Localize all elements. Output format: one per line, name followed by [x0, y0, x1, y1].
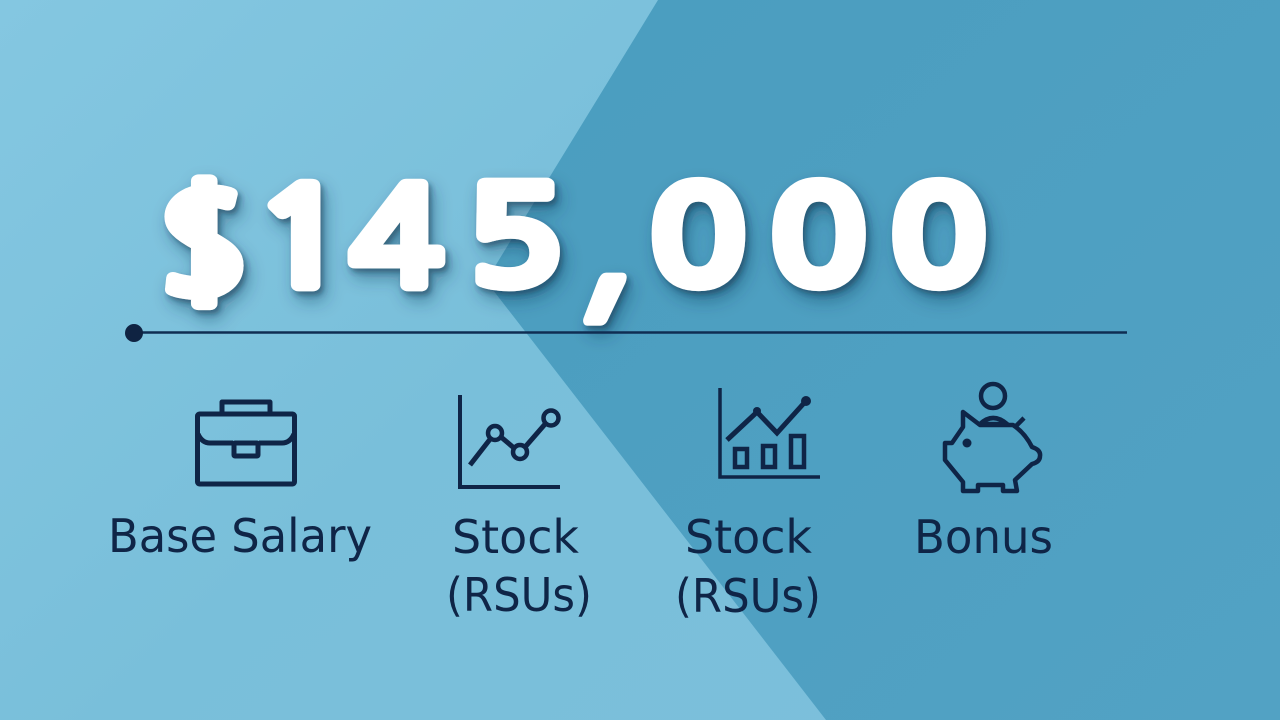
headline amount: 0 — [769, 172, 868, 306]
icon: line chart — [460, 395, 560, 487]
label: stock RSUs first — [446, 510, 592, 622]
headline amount — [155, 117, 988, 323]
label: stock RSUs second: Stock — [685, 510, 812, 564]
label: stock RSUs second — [675, 510, 821, 623]
background dark panel — [486, 0, 1280, 720]
label: base salary: Base Salary — [108, 509, 372, 563]
headline amount: $ — [155, 178, 251, 313]
divider line with dot — [125, 324, 1127, 342]
label: stock RSUs first: (RSUs) — [446, 568, 592, 622]
icon: piggy bank — [945, 384, 1040, 491]
icon: briefcase — [198, 402, 294, 484]
headline amount: 4 — [349, 172, 444, 306]
headline amount: 1 — [253, 173, 351, 307]
icon: bar and line chart — [720, 388, 820, 477]
headline amount: 0 — [889, 172, 988, 306]
label: bonus: Bonus — [914, 510, 1053, 564]
label: stock RSUs first: Stock — [452, 510, 579, 564]
headline amount: 5 — [466, 172, 564, 306]
headline amount: 0 — [649, 172, 747, 306]
headline amount: , — [577, 117, 662, 323]
label: stock RSUs second: (RSUs) — [675, 569, 821, 623]
